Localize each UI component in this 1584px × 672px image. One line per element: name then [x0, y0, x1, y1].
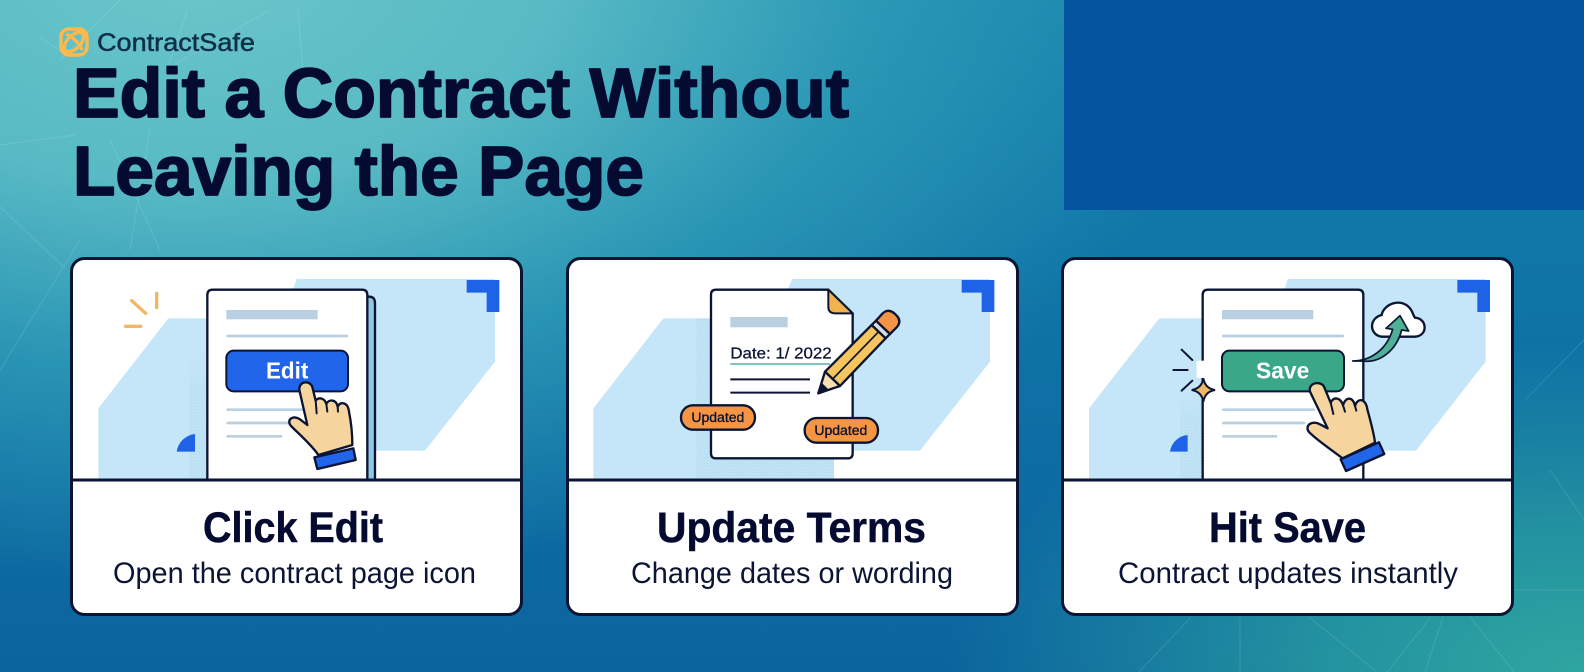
- logo wordmark: ContractSafe: [97, 29, 255, 57]
- heading: Update Terms: [657, 504, 926, 552]
- title: [73, 54, 849, 210]
- illustration: document with pencil: [593, 279, 994, 478]
- updated badge right: Updated: [814, 423, 867, 438]
- illustration: save button and cloud: Save: [1256, 358, 1309, 384]
- illustration: save button and cloud: [1089, 279, 1490, 480]
- divider: [1063, 478, 1512, 482]
- logo icon: [61, 29, 87, 55]
- card background: [1062, 258, 1512, 614]
- card background: [568, 258, 1018, 614]
- description: Change dates or wording: [631, 557, 953, 590]
- illustration: document with pencil: Date: 1/ 2022: [730, 345, 832, 362]
- pencil: [818, 311, 899, 393]
- illustration: edit button on document: [98, 279, 499, 480]
- panel: hit save: [1062, 258, 1512, 614]
- title: Leaving the Page: [73, 132, 644, 210]
- hand: [1307, 383, 1375, 458]
- heading: Hit Save: [1209, 504, 1366, 552]
- updated badge left: Updated: [691, 410, 744, 425]
- panel: update terms: [568, 258, 1018, 614]
- card background: [72, 258, 522, 614]
- illustration: edit button on document: Edit: [266, 358, 309, 384]
- description: Contract updates instantly: [1118, 557, 1458, 590]
- cloud: [1372, 303, 1425, 337]
- updated badge right: [805, 418, 878, 443]
- divider: [568, 478, 1017, 482]
- dark blue rectangle top right: [1064, 0, 1584, 210]
- logo: [61, 29, 255, 57]
- panel: click edit: [72, 258, 522, 614]
- description: Open the contract page icon: [113, 557, 476, 590]
- divider: [72, 478, 521, 482]
- upload arrow: [1353, 316, 1409, 361]
- updated badge left: [681, 405, 755, 430]
- title: Edit a Contract Without: [73, 54, 849, 132]
- heading: Click Edit: [203, 504, 383, 552]
